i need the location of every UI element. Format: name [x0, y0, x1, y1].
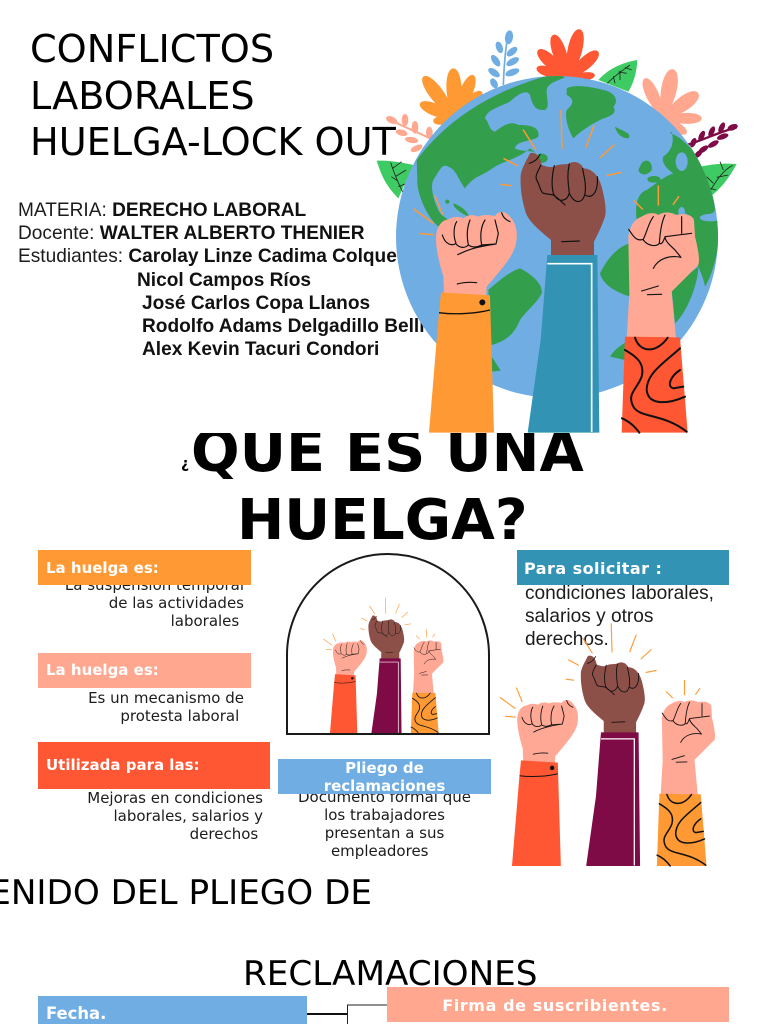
box: pliego de reclamaciones [278, 759, 491, 794]
text: condiciones: salarios y otros [525, 606, 653, 627]
text block: course details: MATERIA: DERECHO LABORAL [18, 200, 306, 221]
text: documento formal: Documento formal que los trabajadores presentan a sus empleadores [298, 788, 471, 860]
illustration: globe with plants and raised fists [376, 29, 738, 434]
heading: contenido del pliego de reclamaciones: RECLAMACIONES [243, 954, 537, 994]
text: mejoras: Mejoras en condiciones laborales, salarios y derechos [87, 789, 263, 843]
text: mecanismo: Es un mecanismo de protesta laboral [88, 689, 244, 725]
box: para solicitar: Para solicitar : [524, 559, 662, 578]
text: condiciones: condiciones laborales, [525, 583, 714, 604]
title: LABORALES [30, 74, 255, 118]
text block: course details: José Carlos Copa Llanos [142, 293, 370, 314]
box: para solicitar [517, 550, 729, 585]
text block: course details [18, 200, 425, 360]
heading: que es una huelga [181, 433, 584, 549]
text: condiciones: derechos. [525, 629, 609, 650]
box: fecha: Fecha. [46, 1004, 106, 1023]
text block: course details: Rodolfo Adams Delgadillo Belli [142, 316, 425, 337]
text block: course details: Alex Kevin Tacuri Condori [142, 339, 379, 360]
heading: contenido del pliego de reclamaciones [0, 873, 537, 994]
heading: que es una huelga: ¿ [181, 456, 189, 472]
box: la huelga es (peach) [38, 653, 251, 688]
box: pliego de reclamaciones: Pliego de [345, 759, 424, 777]
box: la huelga es (orange): La huelga es: [46, 559, 159, 577]
title: CONFLICTOS [30, 28, 274, 72]
box: utilizada para las: Utilizada para las: [46, 756, 200, 774]
text: condiciones [525, 583, 714, 650]
box: la huelga es (peach): La huelga es: [46, 661, 159, 679]
box: la huelga es (orange) [38, 550, 251, 585]
box: firma de suscribientes: Firma de suscribientes. [442, 996, 668, 1015]
title [30, 28, 396, 165]
three raised fists [414, 111, 699, 433]
text block: course details: Docente: WALTER ALBERTO THENIER [18, 223, 365, 244]
plants behind the globe [377, 28, 739, 198]
box: utilizada para las [38, 742, 270, 789]
box: fecha [38, 996, 307, 1024]
text block: course details: Nicol Campos Ríos [137, 270, 311, 291]
text: suspension: La suspensión temporal de las actividades laborales [65, 576, 244, 630]
text block: course details: Estudiantes: Carolay Linze Cadima Colque [18, 246, 397, 267]
globe [396, 73, 720, 398]
box: firma de suscribientes [387, 987, 729, 1022]
title: HUELGA-LOCK OUT [30, 121, 396, 165]
